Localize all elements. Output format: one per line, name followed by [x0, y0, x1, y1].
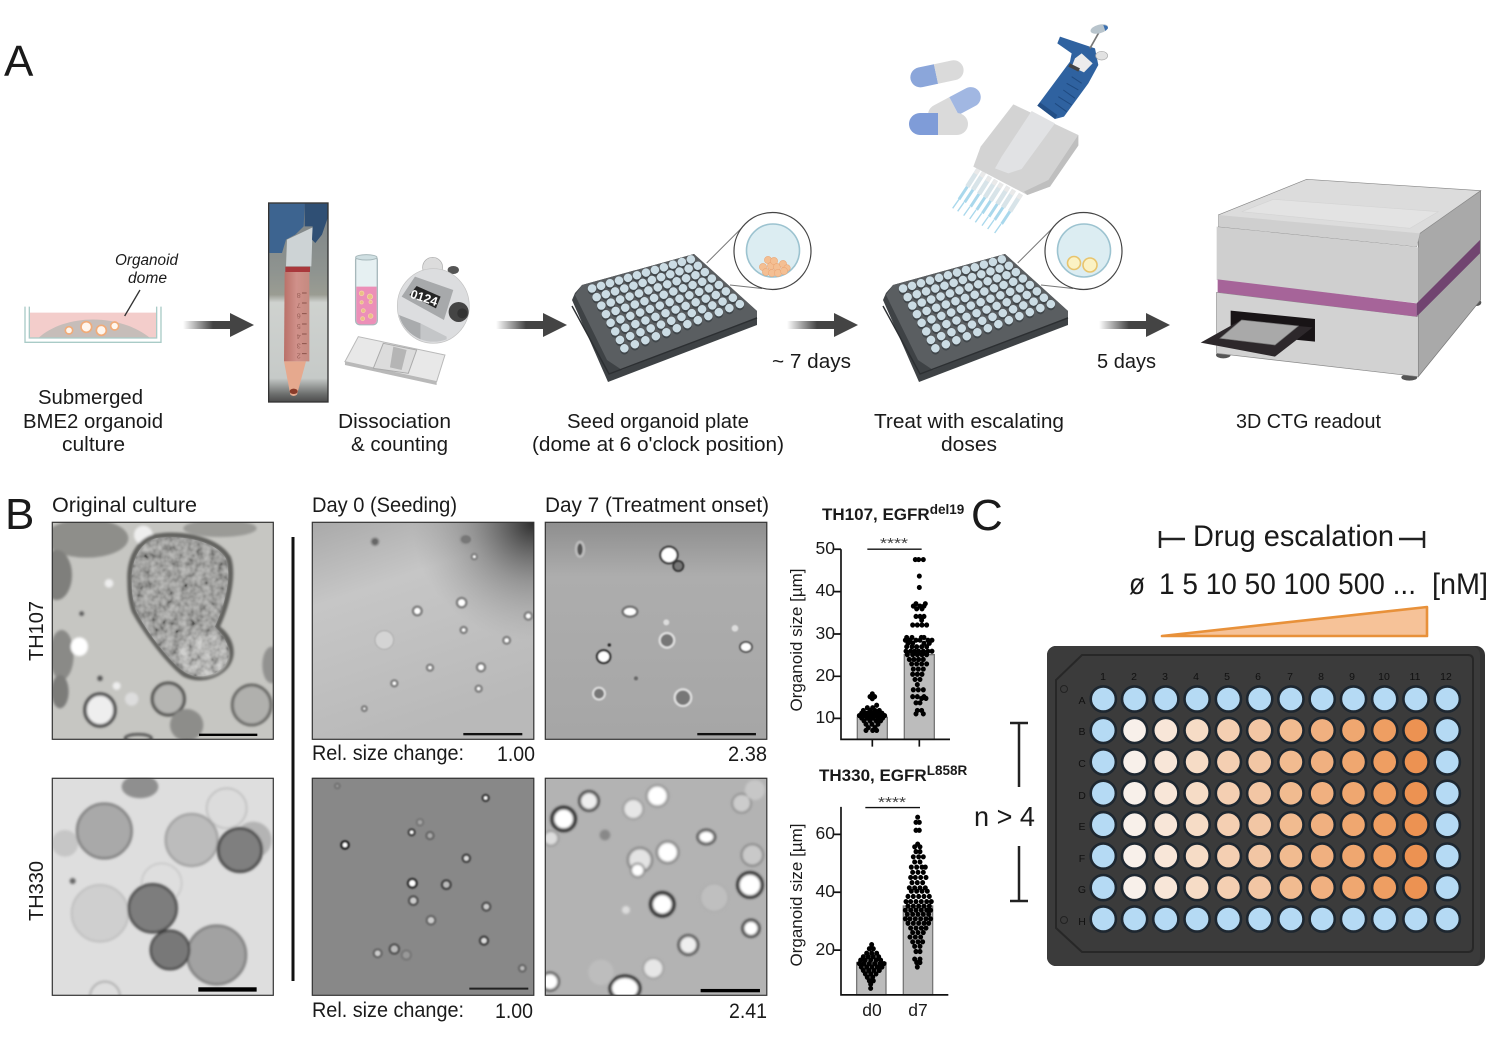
panel label C: C: [971, 491, 1003, 540]
dose gradient wedge: [1162, 607, 1427, 636]
bar chart: TH330 organoid size: [787, 794, 948, 1020]
micrograph: TH107 original culture: [52, 522, 273, 739]
text: submerged culture caption: culture: [62, 434, 125, 456]
chart title TH330: TH330, EGFR: [819, 766, 927, 785]
bar chart: TH107 organoid size: 40: [816, 580, 835, 600]
96-well treatment plate layout: A: [1078, 695, 1086, 707]
bar chart: TH330 organoid size: Organoid size [µm]: [787, 824, 806, 966]
text: dissociation caption: Dissociation: [338, 411, 451, 433]
96-well treatment plate layout: 5: [1224, 671, 1230, 683]
bar chart: TH330 organoid size: 40: [816, 881, 835, 901]
photo: centrifuge tube: 6: [297, 312, 301, 321]
chart title TH107: TH107, EGFR: [822, 505, 930, 524]
96-well treatment plate layout: G: [1078, 884, 1086, 896]
bar chart: TH330 organoid size: ****: [878, 794, 906, 811]
bar chart: TH330 organoid size: 20: [816, 939, 835, 959]
heading: drug escalation with brackets: Drug escalation: [1193, 520, 1394, 553]
chart title TH330: L858R: [927, 763, 967, 778]
photo: centrifuge tube: 5: [297, 322, 301, 331]
chart title TH107: del19: [930, 502, 964, 517]
value 1.00: 1.00: [495, 1000, 533, 1023]
96-well treatment plate layout: [1047, 646, 1485, 966]
counter digits: 0124: [409, 287, 439, 309]
dose labels: 1 5 10 50 100 500 ...: [1159, 568, 1416, 601]
bar chart: TH107 organoid size: 30: [816, 623, 835, 643]
panel label B: B: [5, 490, 34, 539]
heading: day 7: Day 7 (Treatment onset): [545, 494, 769, 517]
label: organoid dome: [115, 252, 179, 287]
96-well treatment plate layout: 6: [1255, 671, 1261, 683]
text: seed plate caption: (dome at 6 o'clock position): [532, 434, 784, 456]
text: readout caption: 3D CTG readout: [1236, 411, 1381, 433]
96-well treatment plate layout: 4: [1193, 671, 1199, 683]
96-well treatment plate layout: B: [1078, 726, 1086, 738]
96-well treatment plate layout: 1: [1100, 671, 1106, 683]
icon: multichannel pipette: [953, 22, 1109, 233]
label: organoid dome: dome: [128, 270, 167, 287]
photo: centrifuge tube: 8: [297, 291, 301, 300]
icon: seeded 96-well plate with magnified well: [572, 212, 811, 382]
micrograph frame: [312, 522, 534, 739]
micrograph frame: [52, 778, 273, 995]
photo: centrifuge tube: 2: [297, 352, 301, 361]
value 2.41: 2.41: [729, 1000, 767, 1023]
bar chart: TH107 organoid size: 10: [816, 707, 835, 727]
text: dissociation caption: [338, 411, 451, 456]
replicate label n > 4: n > 4: [974, 801, 1035, 832]
arrow 2: [496, 313, 567, 337]
text: treat caption: [874, 411, 1064, 456]
dose labels: ø: [1129, 568, 1145, 601]
photo: centrifuge tube: 7: [297, 301, 301, 310]
icon: vial, tally counter and counting slide: [345, 255, 469, 385]
bar chart: TH107 organoid size: ****: [880, 535, 908, 552]
micrograph frame: [545, 522, 767, 739]
value 1.00: 1.00: [497, 743, 535, 766]
micrograph frame: [312, 778, 534, 995]
96-well treatment plate layout: 8: [1318, 671, 1324, 683]
photo: centrifuge tube: 3: [297, 342, 301, 351]
icon: treated 96-well plate with magnified well: [883, 212, 1122, 382]
96-well treatment plate layout: D: [1078, 790, 1086, 802]
micrograph: TH107 day 7: [545, 522, 767, 739]
photo: centrifuge tube: [269, 203, 328, 402]
96-well treatment plate layout: E: [1078, 821, 1086, 833]
micrograph: TH330 day 7: [541, 778, 767, 1000]
micrograph frame: [52, 522, 273, 739]
96-well treatment plate layout: H: [1078, 916, 1086, 928]
96-well treatment plate layout: 7: [1287, 671, 1293, 683]
divider line: [292, 537, 294, 981]
micrograph: TH330 day 0: [312, 778, 534, 995]
micrograph frame: [545, 778, 767, 995]
96-well treatment plate layout: 10: [1378, 671, 1390, 683]
arrow 4: [1099, 313, 1170, 337]
label: relative size change TH107: Rel. size change:: [312, 742, 464, 765]
bar chart: TH330 organoid size: 60: [816, 823, 835, 843]
micrograph: TH330 original culture: [52, 775, 273, 1012]
96-well treatment plate layout: C: [1078, 758, 1086, 770]
bar chart: TH107 organoid size: 50: [816, 538, 835, 558]
label: relative size change TH330: Rel. size change:: [312, 999, 464, 1022]
icon: plate reader: [1201, 179, 1481, 381]
icon: drug capsules: [908, 58, 984, 135]
96-well treatment plate layout: F: [1079, 853, 1085, 865]
text: submerged culture caption: Submerged: [38, 387, 143, 409]
bar chart: TH330 organoid size: d7: [908, 1000, 928, 1020]
row label TH330: TH330: [26, 861, 48, 921]
label: 5 days: 5 days: [1097, 351, 1156, 373]
bar chart: TH107 organoid size: 20: [816, 665, 835, 685]
96-well treatment plate layout: 9: [1349, 671, 1355, 683]
label: organoid dome: Organoid: [115, 252, 179, 269]
96-well treatment plate layout: 2: [1131, 671, 1137, 683]
arrow 1: [183, 313, 254, 337]
label: 7 days: ~ 7 days: [772, 351, 851, 373]
text: submerged culture caption: BME2 organoid: [23, 411, 163, 433]
arrow 3: [787, 313, 858, 337]
replicate label n > 4: [974, 723, 1035, 901]
heading: original culture: Original culture: [52, 494, 197, 517]
96-well treatment plate layout: 3: [1162, 671, 1168, 683]
bar chart: TH107 organoid size: Organoid size [µm]: [787, 568, 806, 712]
bar chart: TH107 organoid size: [787, 535, 950, 747]
96-well treatment plate layout: 11: [1410, 671, 1421, 683]
heading: day 0: Day 0 (Seeding): [312, 494, 457, 517]
text: treat caption: doses: [941, 434, 997, 456]
value 2.38: 2.38: [728, 743, 767, 766]
bar chart: TH330 organoid size: d0: [862, 1000, 882, 1020]
text: seed plate caption: [532, 411, 784, 456]
96-well treatment plate layout: 12: [1440, 671, 1452, 683]
text: submerged culture caption: [23, 387, 163, 456]
text: treat caption: Treat with escalating: [874, 411, 1064, 433]
icon: culture dish with organoid dome: [25, 290, 161, 342]
text: dissociation caption: & counting: [351, 434, 448, 456]
row label TH107: TH107: [26, 601, 48, 661]
micrograph: TH107 day 0: [312, 522, 534, 739]
dose labels: [nM]: [1432, 568, 1488, 601]
photo: centrifuge tube: 4: [297, 332, 301, 341]
text: seed plate caption: Seed organoid plate: [567, 411, 749, 433]
panel label A: A: [4, 37, 34, 86]
